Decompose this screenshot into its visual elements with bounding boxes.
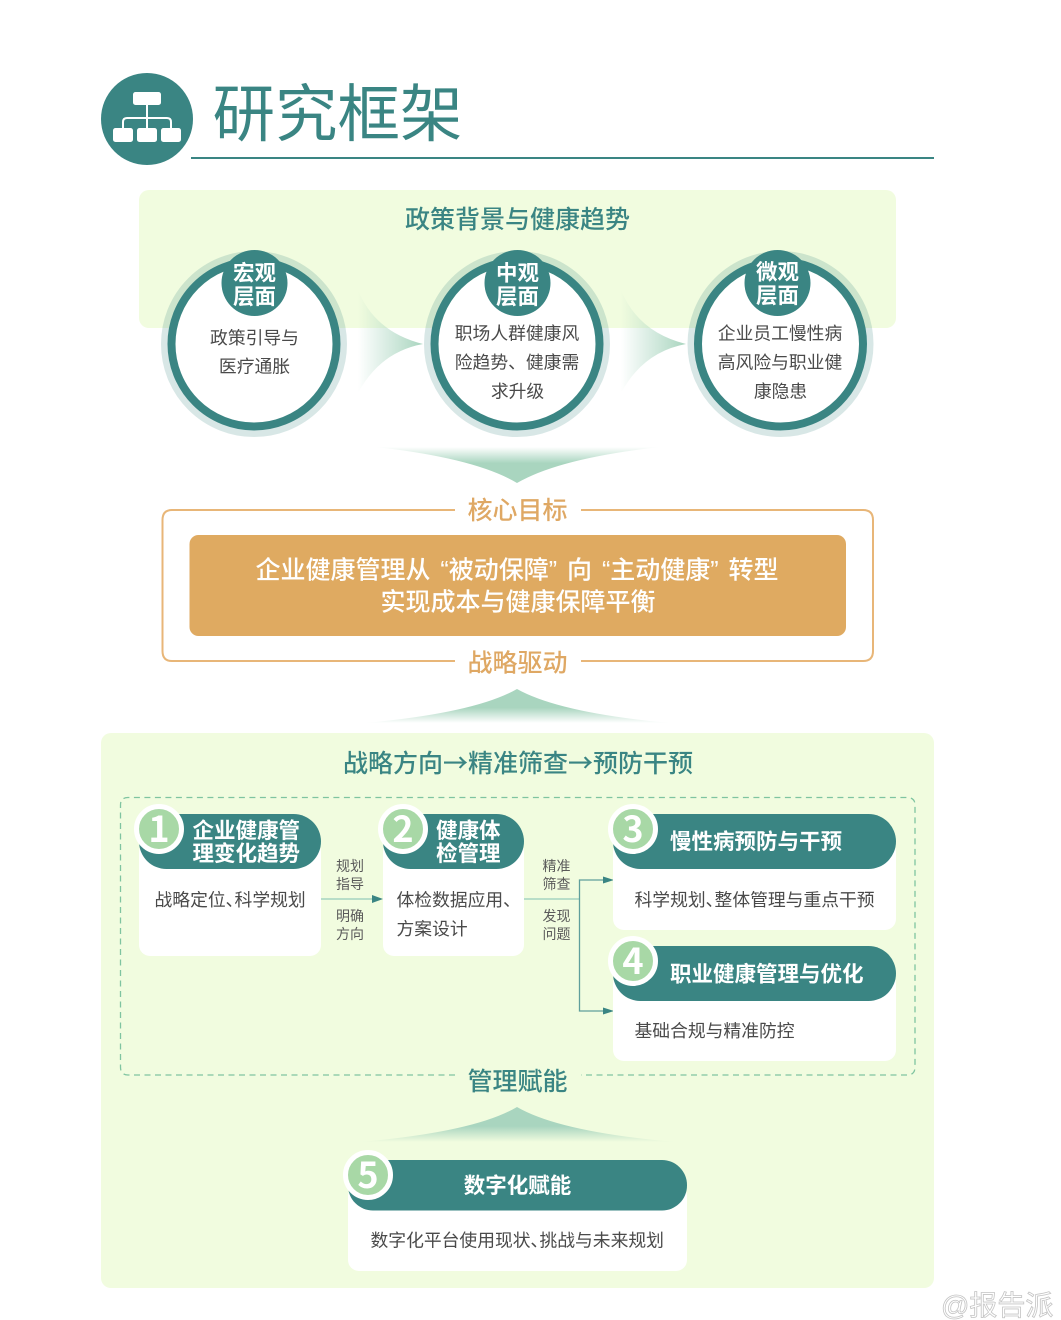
circle: meso level: 层面 bbox=[496, 285, 539, 309]
circle: meso level: 险趋势、健康需 bbox=[455, 352, 579, 372]
connector: card 2 to cards 3 and 4: 发现 bbox=[542, 908, 570, 924]
card 2: health check management: 检管理 bbox=[436, 841, 501, 866]
card 2: health check management: 体检数据应用、 bbox=[396, 890, 512, 910]
circle: macro level: 宏观 bbox=[233, 262, 276, 286]
heading: core goal: 核心目标 bbox=[467, 497, 568, 525]
card 4: occupational health bbox=[610, 933, 896, 1061]
arrow: up to strategy panel bbox=[365, 689, 670, 723]
circle: macro level: 医疗通胀 bbox=[219, 356, 290, 376]
title underline bbox=[191, 157, 934, 159]
card 3: chronic disease prevention: 慢性病预防与干预 bbox=[670, 830, 842, 854]
connector: card 1 to card 2: 明确 bbox=[336, 908, 364, 924]
circle: micro level bbox=[691, 250, 870, 434]
circle: macro level bbox=[164, 250, 344, 434]
dashed frame bbox=[120, 798, 915, 1075]
card 4: occupational health: 4 bbox=[622, 933, 644, 985]
connector: card 1 to card 2: 指导 bbox=[336, 876, 364, 892]
circle: micro level: 高风险与职业健 bbox=[718, 352, 842, 372]
connector: card 2 to cards 3 and 4: 精准 bbox=[542, 858, 570, 874]
card 5: digital enablement bbox=[346, 1147, 687, 1271]
circle: macro level: 层面 bbox=[233, 285, 276, 309]
circle: macro level: 政策引导与 bbox=[210, 328, 299, 348]
panel: strategy bbox=[101, 733, 934, 1288]
card 2: health check management: 方案设计 bbox=[396, 919, 468, 939]
card 2: health check management: 健康体 bbox=[436, 818, 501, 843]
panel: policy background bbox=[139, 190, 896, 328]
card 1: corporate health trends: 企业健康管 bbox=[192, 818, 300, 843]
circle: micro level: 层面 bbox=[756, 284, 799, 308]
connector: card 1 to card 2 bbox=[321, 858, 383, 942]
heading: strategic drive: 战略驱动 bbox=[467, 650, 568, 678]
goal box: 实现成本与健康保障平衡 bbox=[380, 588, 656, 616]
connector: card 1 to card 2: 规划 bbox=[336, 858, 364, 874]
card 4: occupational health: 基础合规与精准防控 bbox=[634, 1021, 795, 1041]
title: 研究框架 bbox=[212, 80, 462, 150]
heading: management enablement: 管理赋能 bbox=[467, 1068, 568, 1096]
card 3: chronic disease prevention: 3 bbox=[622, 801, 644, 853]
connector: card 1 to card 2: 方向 bbox=[336, 926, 364, 942]
goal box bbox=[190, 535, 846, 636]
arrow: meso to micro bbox=[621, 290, 686, 393]
card 1: corporate health trends: 理变化趋势 bbox=[192, 842, 300, 866]
card 1: corporate health trends bbox=[136, 801, 321, 956]
heading: policy background: 政策背景与健康趋势 bbox=[405, 206, 630, 234]
card 1: corporate health trends: 战略定位、科学规划 bbox=[154, 890, 306, 910]
circle: meso level: 求升级 bbox=[491, 382, 544, 402]
card 5: digital enablement: 数字化平台使用现状、挑战与未来规划 bbox=[370, 1230, 664, 1250]
circle: meso level bbox=[428, 250, 606, 434]
arrow: down to core goal bbox=[375, 447, 660, 483]
arrow: macro to meso bbox=[358, 290, 423, 393]
circle: meso level: 中观 bbox=[496, 262, 539, 286]
circle: micro level: 微观 bbox=[756, 260, 799, 284]
card 2: health check management: 2 bbox=[392, 801, 414, 853]
circle: micro level: 企业员工慢性病 bbox=[718, 324, 842, 344]
connector: card 2 to cards 3 and 4: 问题 bbox=[542, 926, 570, 942]
card 3: chronic disease prevention: 科学规划、整体管理与重点干预 bbox=[634, 890, 875, 910]
connector: card 2 to cards 3 and 4: 筛查 bbox=[542, 876, 570, 892]
panel: core goal frame bbox=[162, 510, 873, 661]
card 4: occupational health: 职业健康管理与优化 bbox=[670, 962, 864, 986]
heading: strategy: 战略方向→精准筛查→预防干预 bbox=[343, 744, 693, 780]
icon: organisation chart badge bbox=[101, 73, 193, 165]
goal box: 企业健康管理从 “被动保障” 向 “主动健康” 转型 bbox=[255, 556, 779, 584]
arrow: up to management enablement bbox=[360, 1107, 675, 1142]
circle: meso level: 职场人群健康风 bbox=[455, 324, 579, 344]
connector: card 2 to cards 3 and 4 bbox=[524, 858, 614, 1014]
card 5: digital enablement: 数字化赋能 bbox=[464, 1174, 571, 1198]
card 2: health check management bbox=[380, 801, 524, 956]
card 1: corporate health trends: 1 bbox=[148, 801, 170, 853]
card 3: chronic disease prevention bbox=[610, 801, 896, 930]
circle: micro level: 康隐患 bbox=[754, 382, 807, 402]
card 5: digital enablement: 5 bbox=[357, 1147, 379, 1199]
